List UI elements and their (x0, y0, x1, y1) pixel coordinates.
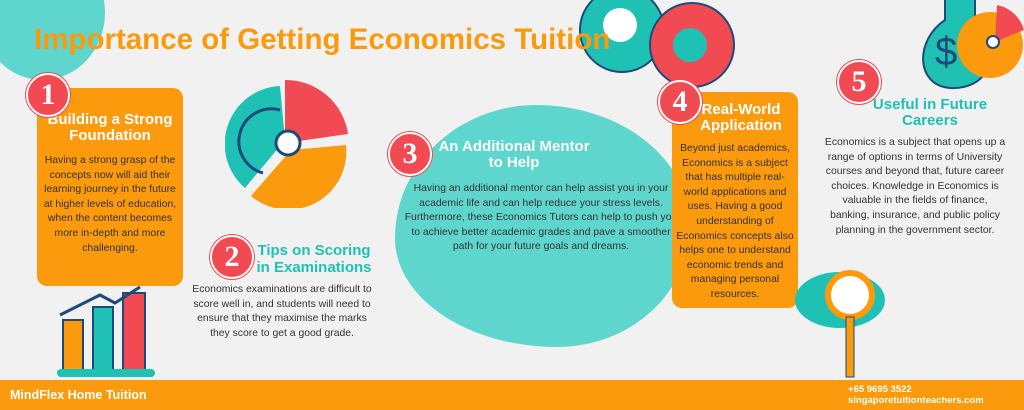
badge 4 (658, 80, 702, 124)
badge 2: 2 (224, 240, 240, 273)
footer contacts (848, 384, 984, 406)
text 2: Economics examinations are difficult to score well in, and students will need to ensure that they maximise the marks they score to get a good grade. (192, 284, 372, 339)
badge 3: 3 (402, 137, 418, 170)
panel 4 (672, 92, 798, 308)
text 1: Having a strong grasp of the concepts now will aid their learning journey in the future at higher levels of education, when the content becomes more in-depth and more challenging. (44, 155, 176, 254)
text 5: Economics is a subject that opens up a range of options in terms of University courses and beyond that, future career choices. Knowledge in Economics is valuable in the fields of finance, banking, insurance, and public policy planning in the government sector. (825, 137, 1005, 236)
heading 4: Real-World Application (700, 101, 782, 134)
footer contacts: +65 9695 3522 (848, 384, 912, 395)
teal blob center (395, 105, 690, 347)
heading 5: Useful in Future Careers (873, 96, 987, 129)
badge 5: 5 (852, 65, 866, 98)
gears icon (579, 0, 735, 88)
footer (0, 380, 1024, 410)
text 3: Having an additional mentor can help assist you in your academic life and can help reduce your stress levels. Furthermore, these Economics Tutors can help to push you to achieve better academic grades and pave a smoother path for your future goals and dreams. (405, 183, 677, 252)
badge 2 (210, 235, 254, 279)
cloud magnifier icon (795, 270, 885, 378)
footer brand: MindFlex Home Tuition (10, 388, 147, 402)
badge 3 (388, 132, 432, 176)
heading 3: An Additional Mentor to Help (438, 138, 590, 171)
bar chart icon (57, 286, 155, 377)
teal blob top-left (0, 0, 105, 80)
money bag icon (922, 0, 1024, 90)
money bag icon: $ (935, 30, 957, 74)
badge 4: 4 (672, 85, 688, 118)
heading 1: Building a Strong Foundation (48, 111, 172, 144)
badge 1: 1 (40, 78, 56, 111)
badge 1 (26, 73, 70, 117)
panel 1 (37, 88, 183, 286)
title: Importance of Getting Economics Tuition (34, 23, 610, 56)
badge 5 (837, 60, 881, 104)
pie chart (225, 80, 348, 208)
footer contacts: singaporetuitionteachers.com (848, 395, 984, 406)
text 4: Beyond just academics, Economics is a subject that has multiple real-world applications and uses. Having a good understanding of Economics concepts also helps one to understand economic trends and managing personal resources. (676, 143, 794, 300)
heading 2: Tips on Scoring in Examinations (256, 242, 372, 276)
